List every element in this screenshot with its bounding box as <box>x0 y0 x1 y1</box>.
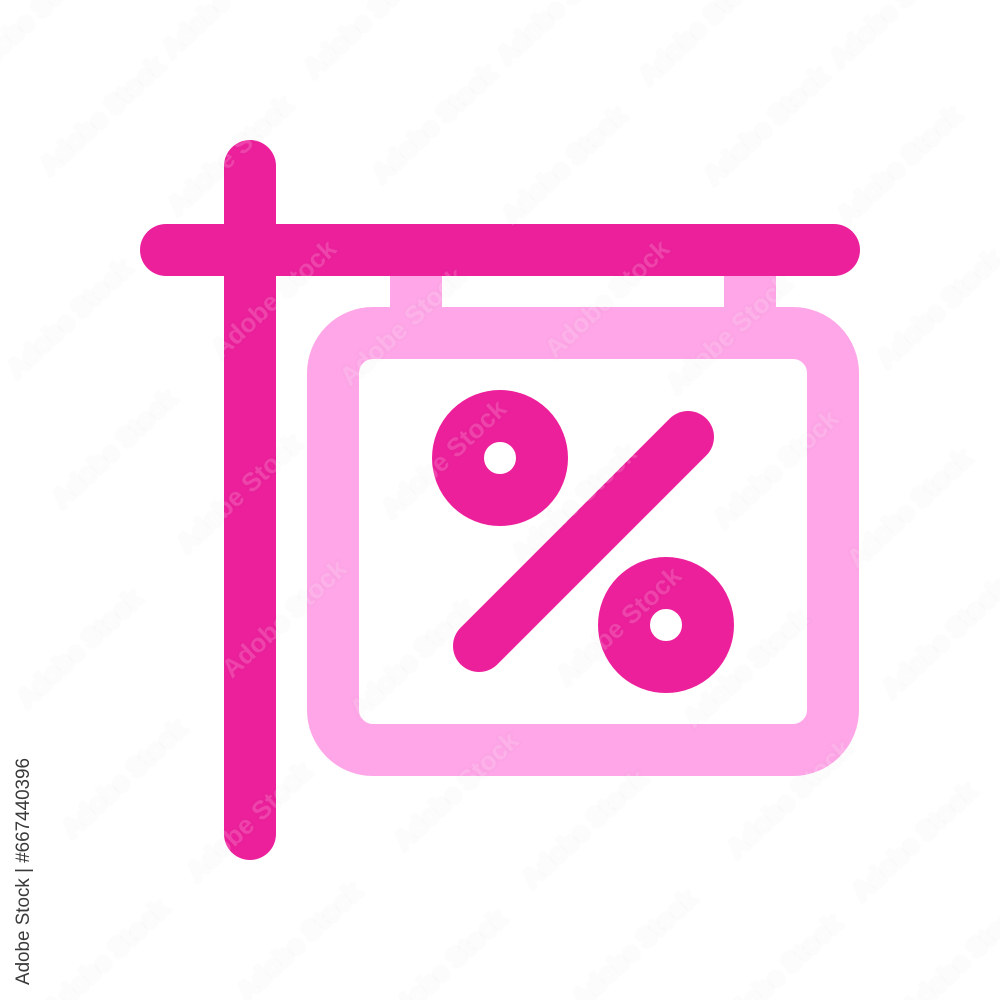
watermark pattern: Adobe Stock <box>344 593 481 724</box>
watermark pattern: Adobe Stock <box>661 268 798 399</box>
watermark pattern: Adobe Stock <box>551 560 688 691</box>
watermark pattern: Adobe Stock <box>366 58 503 189</box>
watermark pattern: Adobe Stock <box>206 233 343 364</box>
watermark pattern: Adobe Stock <box>539 233 676 364</box>
watermark pattern: Adobe Stock <box>171 428 308 559</box>
watermark pattern: Adobe Stock <box>708 403 845 534</box>
percent symbol <box>458 416 708 667</box>
sign board with hangers <box>333 270 833 750</box>
watermark pattern: Adobe Stock <box>846 776 983 907</box>
watermark pattern: Adobe Stock <box>334 261 471 392</box>
watermark pattern: Adobe Stock <box>56 713 193 844</box>
watermark pattern: Adobe Stock <box>1 253 138 384</box>
stock image credit: Adobe Stock | #667440396 <box>12 758 34 985</box>
watermark pattern: Adobe Stock <box>721 733 858 864</box>
watermark pattern: Adobe Stock <box>181 756 318 887</box>
watermark pattern: Adobe Stock <box>46 383 183 514</box>
watermark pattern: Adobe Stock <box>831 100 968 231</box>
watermark pattern: Adobe Stock <box>841 443 978 574</box>
watermark pattern: Adobe Stock <box>11 583 148 714</box>
watermark pattern: Adobe Stock <box>34 50 171 181</box>
watermark pattern: Adobe Stock <box>698 60 835 191</box>
watermark pattern: Adobe Stock <box>496 100 633 231</box>
watermark pattern: Adobe Stock <box>506 438 643 569</box>
watermark pattern: Adobe Stock <box>216 553 353 684</box>
watermark pattern: Adobe Stock <box>388 725 525 856</box>
post and crossbar <box>166 166 834 834</box>
watermark pattern: Adobe Stock <box>376 393 513 524</box>
watermark pattern: Adobe Stock <box>162 90 299 221</box>
watermark pattern: Adobe Stock <box>516 763 653 894</box>
watermark pattern: Adobe Stock <box>678 603 815 734</box>
